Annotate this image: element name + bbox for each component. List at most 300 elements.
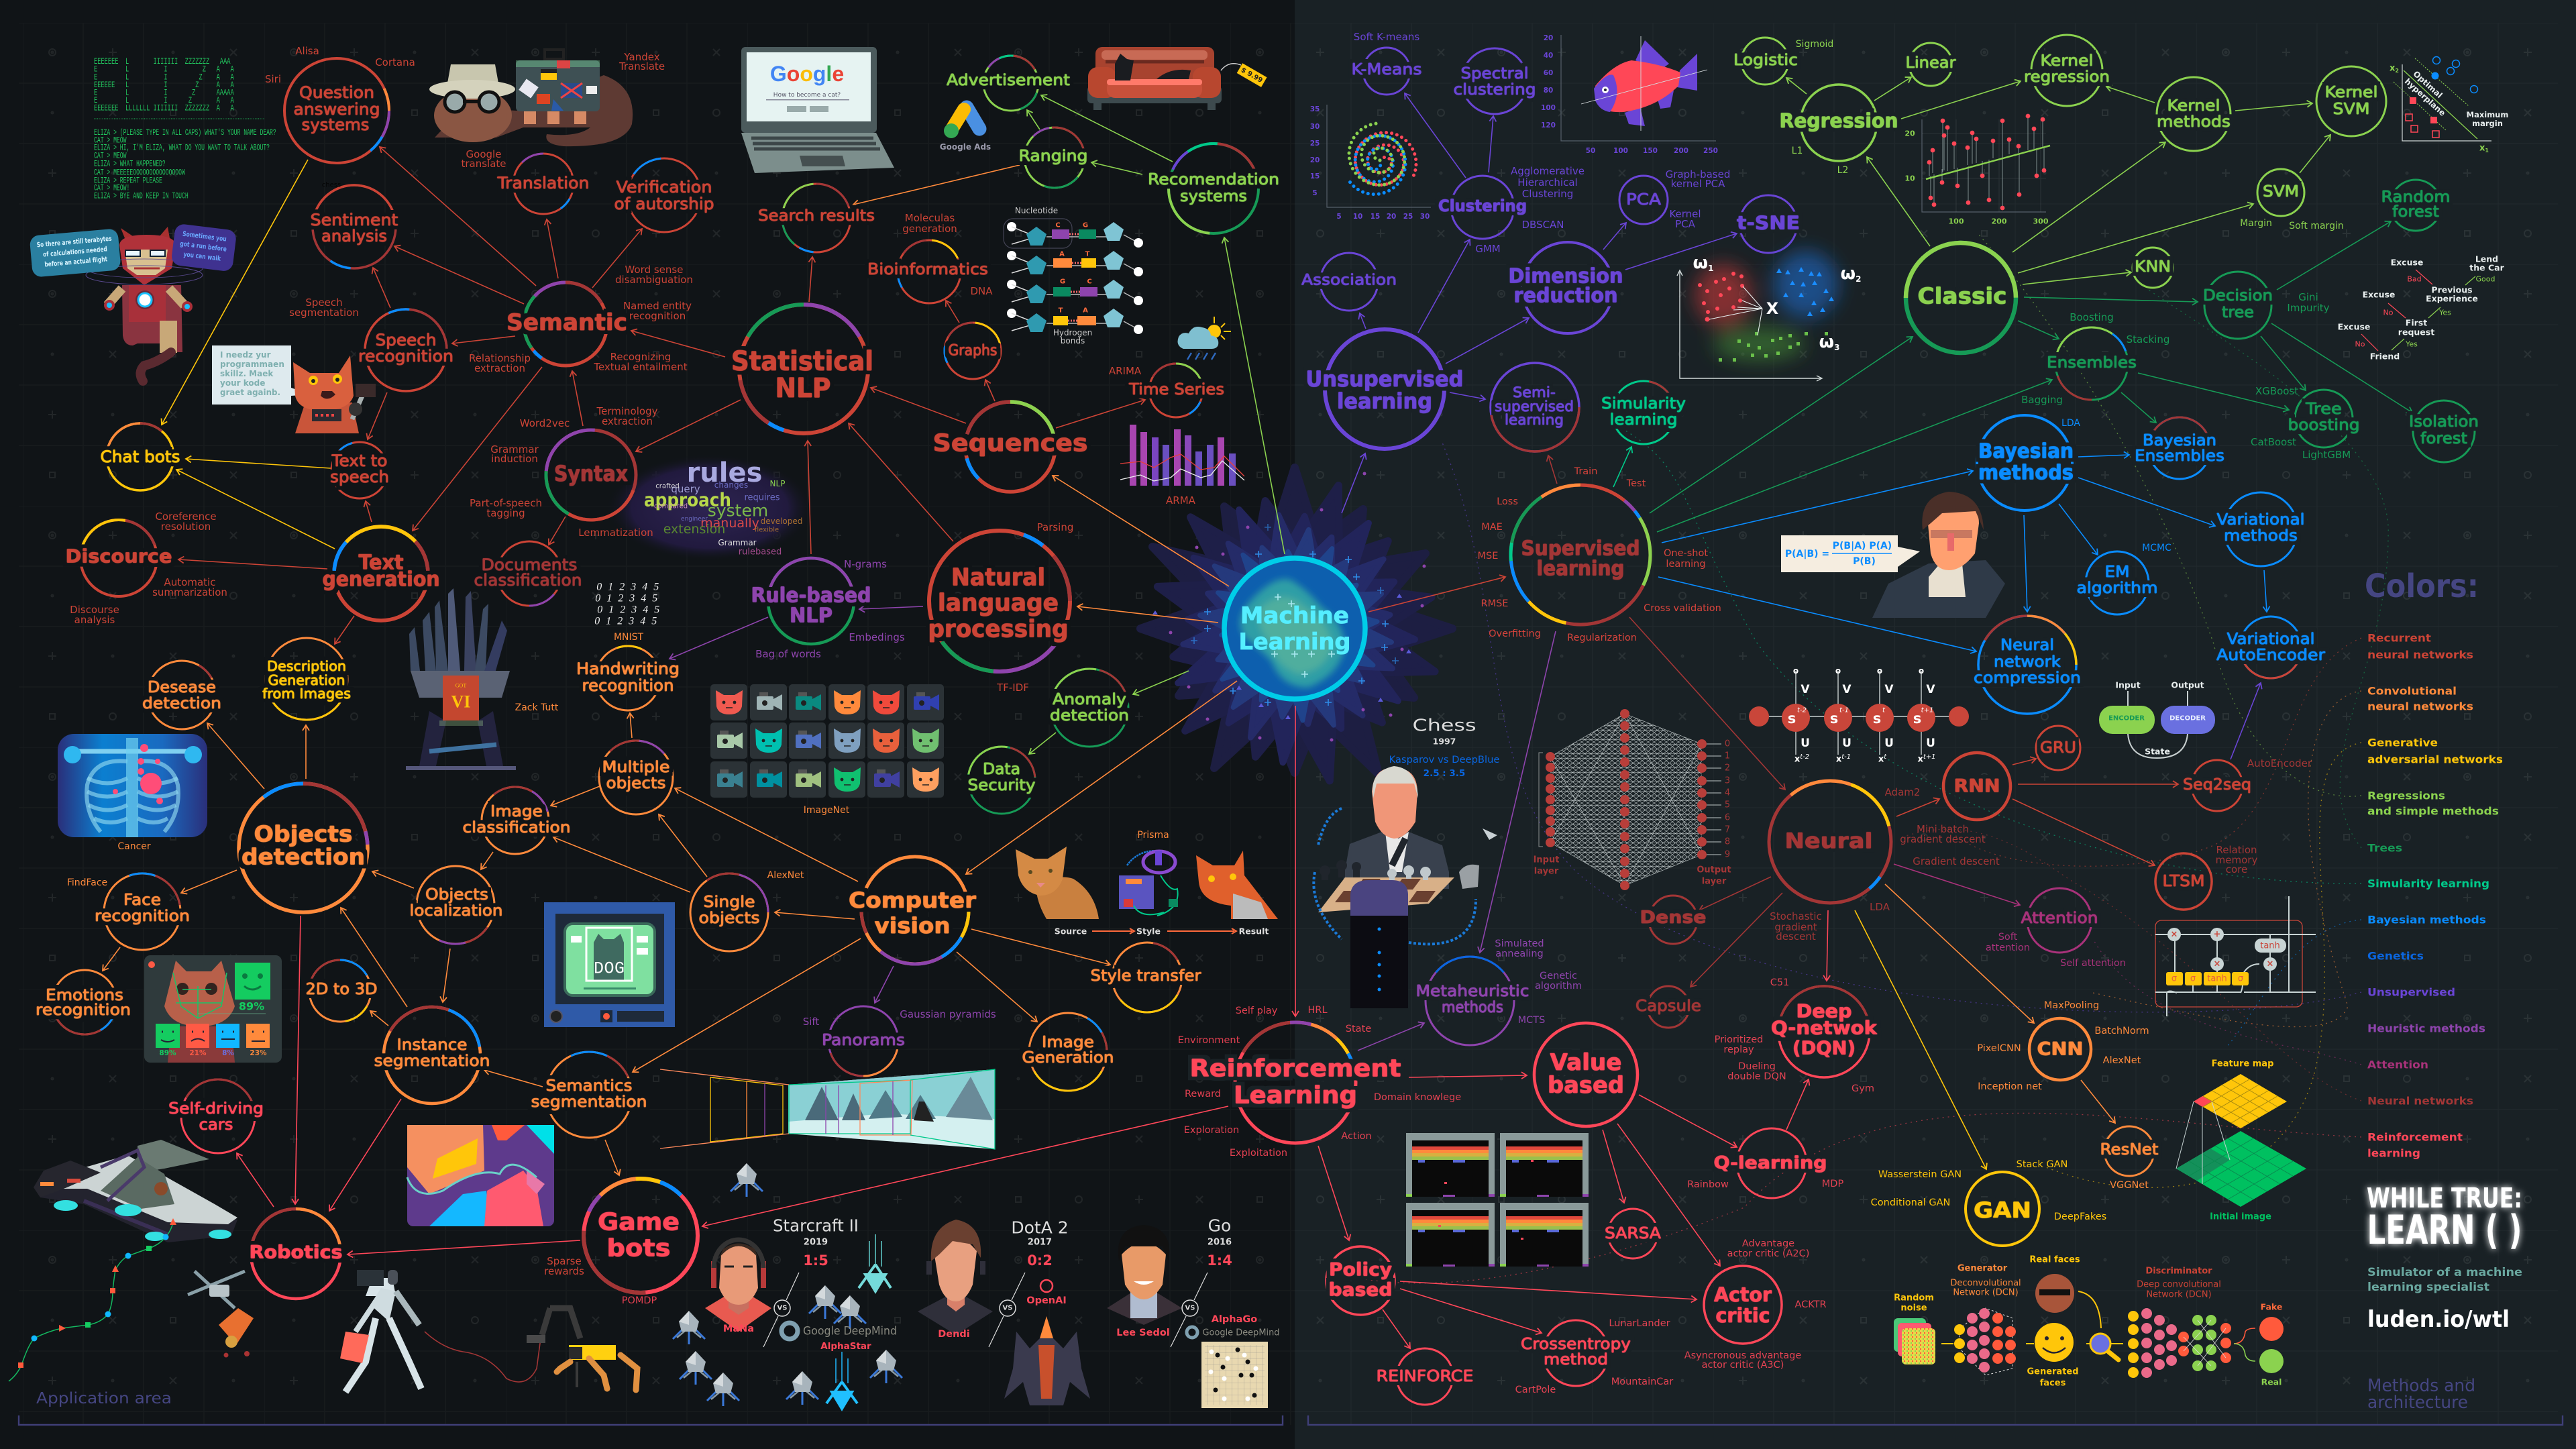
illustration: DNA helix: Hydrogen [1053, 328, 1092, 337]
illustration: face emotion panel [144, 955, 282, 1063]
illustration: iron man cat with speech bubbles: you can walk [183, 251, 221, 263]
node: Policy based: Policy [1329, 1260, 1392, 1280]
section: Dota 2 match: VS [1003, 1304, 1012, 1312]
chart: SVM margin diagram: x [2479, 144, 2485, 153]
node: 2D to 3D [298, 949, 382, 1033]
legend: colour key [2367, 632, 2503, 1159]
node: Data Security [961, 739, 1042, 821]
labels: semantic tasks: ARMA [1166, 494, 1196, 506]
node: Single objects [675, 858, 784, 967]
illustration: retro monitor DOG: DOG [594, 959, 625, 978]
legend: colour key: Convolutional [2367, 684, 2457, 698]
chart: LSTM cell [2155, 896, 2316, 1016]
node: Variational methods: methods [2224, 527, 2298, 545]
labels: tree terms: Boosting [2070, 311, 2114, 323]
node: Image Generation [1015, 999, 1121, 1105]
labels: semantic tasks: Terminology [596, 405, 658, 417]
labels: semantic tasks: Word sense [625, 264, 683, 276]
chart: RNN unrolled diagram: s [1913, 710, 1921, 727]
chart: fish regression: 20 [1544, 34, 1553, 42]
illustration: word cloud rules: engineer [681, 516, 708, 523]
node: Unsupervised learning: learning [1337, 388, 1432, 414]
node: Self-driving cars: Self-driving [168, 1100, 264, 1118]
node: Handwriting recognition [576, 637, 680, 720]
chart: RNN unrolled diagram: x [1836, 754, 1841, 765]
illustration: red cat with programmer speech box: I needz yur [220, 350, 271, 360]
chart: spiral clusters: 15 [1310, 172, 1320, 180]
chart: t-SNE clusters: ω [1693, 253, 1708, 273]
chart: RNN unrolled diagram: t+1 [1921, 707, 1933, 714]
labels: reinforcement learning terms: Exploitation [1230, 1148, 1287, 1159]
node: Documents classification: classification [474, 571, 582, 590]
node: Time Series [1128, 354, 1224, 427]
chart: RNN unrolled diagram: s [1788, 710, 1796, 727]
node: Natural language processing [900, 502, 1099, 700]
chart: decision tree labels: Good [2476, 275, 2495, 283]
chart: RNN unrolled diagram: s [1830, 710, 1838, 727]
section: Go match: VS [1185, 1304, 1195, 1312]
chart: spiral clusters: 5 [1312, 189, 1318, 197]
node: Neural [1744, 756, 1916, 928]
node: Sentiment analysis: analysis [321, 227, 387, 246]
node: Kernel regression [2024, 35, 2110, 106]
chart: decision tree labels: No [2355, 339, 2365, 349]
node: Bayesian methods: methods [1978, 462, 2074, 484]
illustration: DNA helix: C [1087, 278, 1092, 286]
chart: SVM margin diagram: Maximum [2467, 110, 2508, 119]
illustration: word cloud rules: extension [663, 522, 725, 537]
labels: CNN and GAN terms: MaxPooling [2044, 1000, 2099, 1011]
labels: neural terms: descent [1776, 930, 1816, 943]
chart: neural network diagram: 8 [1725, 837, 1730, 847]
node: RNN: RNN [1953, 775, 2000, 797]
labels: supervised learning terms: Test [1626, 478, 1646, 489]
chart: t-SNE clusters: 1 [1708, 264, 1713, 273]
node: Verification of autorship [612, 144, 716, 247]
labels: GAN variants: DeepFakes [2054, 1212, 2106, 1222]
labels: purple NLP terms [755, 558, 996, 1028]
node: Spectral clustering [1453, 48, 1536, 114]
node: Seq2seq [2183, 760, 2251, 811]
illustration: ELIZA terminal: E L I Z A A [94, 97, 234, 106]
chart: regression scatter: 300 [2033, 217, 2049, 225]
node: Verification of autorship: Verification [616, 178, 712, 197]
illustration: retro monitor DOG [544, 902, 675, 1027]
illustration: face emotion panel: 8% [222, 1049, 234, 1057]
chart: LSTM cell: × [2267, 959, 2273, 969]
chart: fish regression: 60 [1544, 69, 1553, 77]
illustration: robot woman with bag [340, 1270, 541, 1392]
labels: reinforcement learning terms: Asyncronous advantage [1684, 1350, 1801, 1361]
chart: RNN unrolled diagram: t-2 [1800, 753, 1809, 761]
chart: fish regression: 120 [1541, 121, 1556, 129]
node: Chat bots [101, 418, 180, 496]
node: Isolation forest: Isolation [2409, 413, 2479, 431]
node: 2D to 3D: 2D to 3D [306, 981, 377, 998]
labels: reinforcement learning terms: CartPole [1515, 1385, 1556, 1395]
chart: GAN pipeline: Generated [2027, 1367, 2079, 1377]
node: Objects localization: localization [409, 902, 503, 920]
chart: spiral clusters: 20 [1387, 213, 1396, 221]
node: Q-learning: Q-learning [1713, 1153, 1827, 1173]
node: Random forest [2381, 180, 2450, 231]
chart: neural network diagram: 1 [1725, 751, 1730, 761]
node: Dense: Dense [1640, 908, 1707, 928]
node: Bayesian Ensembles: Bayesian [2143, 432, 2216, 449]
node: GRU [2036, 726, 2080, 770]
node: Emotions recognition: Emotions [46, 987, 123, 1004]
node: Panorams [822, 1001, 905, 1081]
chart: decision tree labels: Lend [2475, 254, 2498, 264]
chart: LSTM cell: tanh [2207, 974, 2227, 983]
node: Clustering: Clustering [1438, 197, 1527, 215]
illustration: word cloud rules: rulebased [739, 547, 782, 557]
labels: unsupervised terms: Agglomerative [1511, 165, 1585, 177]
illustration: Bayes portrait and formula: P(B) [1853, 556, 1876, 567]
heading: Methods and architecture [2367, 1376, 2475, 1413]
node: Supervised learning: Supervised [1521, 537, 1640, 561]
illustration: Bayes portrait and formula: P(A|B) = [1785, 549, 1829, 559]
node: Self-driving cars: cars [199, 1116, 233, 1134]
labels: semantic tasks: Lemmatization [578, 527, 653, 539]
node: Logistic: Logistic [1733, 52, 1798, 69]
node: Bayesian Ensembles: Ensembles [2135, 447, 2224, 465]
node: Decision tree [2203, 272, 2273, 339]
legend: colour key: adversarial networks [2367, 753, 2503, 766]
labels: CNN and GAN terms: PixelCNN [1977, 1043, 2021, 1054]
labels: tree terms: Bagging [2021, 394, 2063, 406]
labels: semantic tasks: Recognizing [610, 351, 671, 363]
chart: decision tree labels: Excuse [2338, 322, 2370, 331]
chart: spiral clusters [1310, 105, 1431, 221]
node: Image classification: Image [490, 803, 543, 820]
section: Chess match and illustration: Kasparov vs DeepBlue [1389, 755, 1500, 765]
labels: computer vision terms: FindFace [67, 877, 107, 888]
legend: colour key: neural networks [2367, 648, 2473, 661]
labels: neural terms: Stochastic [1770, 910, 1822, 922]
node: SVM: SVM [2263, 183, 2299, 201]
chart: RNN unrolled diagram: t-1 [1839, 707, 1849, 714]
chart: LSTM cell: σ [2171, 974, 2177, 983]
illustration: ELIZA terminal: ELIZA > WHAT HAPPENED? [94, 160, 166, 169]
node: Instance segmentation: segmentation [374, 1053, 490, 1070]
node: Tree boosting [2288, 390, 2360, 447]
labels: semantic tasks: Alisa [295, 45, 319, 57]
node: Bayesian methods [1977, 415, 2074, 511]
section: Go match [1107, 1216, 1280, 1408]
illustration: style transfer cats [1016, 847, 1278, 936]
node: K-Means: K-Means [1351, 61, 1422, 78]
section: Starcraft II match: Starcraft II [773, 1216, 859, 1236]
illustration: iron man cat with speech bubbles: Sometimes you [182, 231, 227, 244]
labels: semantic tasks: Named entity [623, 300, 692, 312]
chart: t-SNE clusters: X [1766, 299, 1779, 318]
illustration: ELIZA terminal: EEEEEEE LLLLLLL IIIIIII ZZZZZZZ A A [94, 104, 234, 113]
node: Semantic [506, 265, 627, 383]
chart: GAN pipeline: Discriminator [2145, 1267, 2212, 1276]
chart: neural network diagram: 5 [1725, 800, 1730, 810]
node: Kernel regression: Kernel [2041, 52, 2093, 70]
heading: Colors: Colors: [2365, 568, 2479, 605]
node: PCA [1619, 176, 1668, 224]
node: Semantics segmentation: Semantics [546, 1077, 632, 1095]
labels: tree terms: LightGBM [2302, 449, 2351, 461]
chart: spiral clusters: 30 [1310, 123, 1320, 131]
heading: Application area: Application area [36, 1390, 172, 1407]
node: Verification of autorship: of autorship [614, 195, 714, 213]
labels: unsupervised terms: GMM [1475, 243, 1501, 255]
chart: SVM margin diagram: hyperplane [2403, 76, 2447, 118]
node: Recomendation systems: systems [1180, 188, 1247, 205]
node: Self-driving cars [168, 1066, 268, 1167]
chart: fish regression [1541, 34, 1718, 155]
labels: tree terms [2021, 291, 2351, 461]
chart: neural network diagram: 7 [1725, 825, 1730, 835]
node: Face recognition: recognition [95, 908, 190, 925]
chart: t-SNE clusters [1677, 251, 1861, 381]
chart: GAN pipeline: noise [1900, 1303, 1927, 1313]
labels: semantic tasks: Word2vec [520, 417, 570, 429]
node: Ranging: Ranging [1018, 148, 1088, 165]
labels: bayesian terms: MCMC [2142, 543, 2171, 553]
node: Neural network compression [1958, 596, 2096, 734]
illustration: chest x-ray [58, 734, 207, 837]
section: Chess match and illustration: Chess [1413, 715, 1476, 735]
node: Data Security: Data [983, 761, 1020, 778]
illustration: ELIZA terminal: CAT > MEOW [94, 152, 127, 161]
chart: neural network diagram: Input [1534, 855, 1559, 865]
legend: colour key: Regressions [2367, 789, 2445, 802]
node: Question answering systems [265, 39, 409, 182]
node: Bayesian Ensembles [2135, 409, 2224, 488]
labels: supervised learning terms: MAE [1481, 522, 1503, 533]
chart: RNN unrolled diagram: t-2 [1797, 707, 1807, 714]
labels: neural terms: gradient [1774, 921, 1817, 933]
arrows: all connections [103, 77, 2412, 1348]
chart: feature map: Initial image [2210, 1212, 2271, 1222]
node: KNN: KNN [2135, 258, 2171, 276]
illustration: DNA helix: G [1083, 221, 1088, 229]
node: Translation: Translation [496, 174, 589, 193]
node: Simularity learning: Simularity [1601, 395, 1686, 413]
chart: regression scatter [1904, 114, 2050, 225]
illustration: style transfer cats: Result [1239, 926, 1269, 936]
node: Speech recognition [352, 296, 460, 405]
node: Attention [2021, 888, 2098, 953]
node: Reinforcement Learning: Reinforcement [1190, 1055, 1401, 1083]
node: Value based: Value [1550, 1049, 1622, 1076]
illustration: word cloud rules: query [671, 483, 700, 495]
node: PCA: PCA [1626, 191, 1661, 209]
illustration: MNIST digits: 0 1 2 3 4 5 [597, 604, 661, 616]
labels: reinforcement learning terms: Action [1341, 1131, 1372, 1142]
labels: tree terms: Stacking [2127, 333, 2169, 345]
section: Go match: 2016 [1208, 1237, 1232, 1248]
node: Simularity learning [1601, 376, 1686, 449]
node: Capsule: Capsule [1635, 998, 1701, 1015]
illustration: red cat with programmer speech box: graet againb. [220, 388, 280, 397]
node: Spectral clustering: clustering [1453, 81, 1536, 99]
chart: LSTM cell: × [2171, 930, 2178, 939]
illustration: encoder decoder: ENCODER [2108, 715, 2145, 722]
illustration: machine learning burst [1118, 443, 1479, 801]
node: Rule-based NLP: Rule-based [751, 584, 871, 608]
node: Translation [496, 141, 589, 227]
chart: decision tree labels: Bad [2407, 275, 2422, 283]
labels: semantic tasks: Translate [619, 60, 665, 72]
labels: semantic tasks: extraction [474, 362, 525, 374]
labels: computer vision terms: MNIST [614, 632, 644, 643]
legend: colour key: Attention [2367, 1059, 2428, 1071]
node: Search results [758, 170, 875, 266]
node: Variational methods: Variational [2216, 511, 2305, 529]
labels: reinforcement learning terms [622, 977, 1874, 1395]
illustration: ELIZA terminal: ELIZA > REPEAT PLEASE [94, 176, 162, 186]
section: Starcraft II match: 1:5 [803, 1252, 828, 1269]
node: Single objects: Single [703, 894, 755, 911]
chart: GAN pipeline: Random [1894, 1293, 1934, 1303]
node: Image classification [463, 773, 570, 867]
node: Supervised learning [1482, 456, 1679, 653]
labels: semantic tasks: Automatic [164, 576, 215, 588]
node: Dimension reduction: reduction [1513, 284, 1618, 307]
chart: decision tree labels: Yes [2405, 339, 2418, 349]
chart: GAN pipeline: Deep convolutional [2137, 1280, 2221, 1289]
node: Metaheuristic methods: Metaheuristic [1415, 983, 1529, 1000]
node: Isolation forest: forest [2420, 430, 2467, 447]
illustration: DNA helix: Nucleotide [1015, 206, 1058, 215]
node: Speech recognition: Speech [376, 331, 436, 350]
labels: semantic tasks: Moleculas [905, 212, 955, 224]
node: Text generation: generation [322, 568, 440, 592]
legend: colour key: Recurrent [2367, 632, 2431, 644]
illustration: encoder decoder: State [2145, 746, 2170, 757]
labels: neural terms: gradient descent [1900, 833, 1986, 845]
node: Logistic [1733, 38, 1798, 85]
labels: unsupervised terms: PCA [1675, 218, 1696, 230]
section: Go match: Lee Sedol [1116, 1328, 1170, 1338]
chart: neural network diagram: 3 [1725, 775, 1730, 786]
illustration: word cloud rules: compared [654, 503, 688, 510]
illustration: DNA helix: A [1059, 251, 1065, 258]
node: Crossentropy method [1521, 1320, 1631, 1386]
node: Neural network compression: compression [1974, 669, 2081, 687]
labels: computer vision terms [67, 632, 1169, 888]
node: Sentiment analysis: chess [322, 181, 341, 189]
labels: GAN variants [1871, 1159, 2106, 1222]
labels: tree terms: Impurity [2287, 302, 2330, 314]
chart: LSTM cell: tanh [2260, 941, 2280, 951]
illustration: word cloud rules: manually [700, 516, 759, 531]
illustration: word cloud rules [606, 454, 814, 561]
node: Dimension reduction [1508, 242, 1623, 333]
chart: RNN unrolled diagram: V [1801, 683, 1810, 696]
labels: GAN variants: Wasserstein GAN [1878, 1169, 1962, 1180]
illustration: ELIZA terminal: E L I Z A A [94, 73, 234, 83]
illustration: word cloud rules: crafted [655, 483, 680, 490]
legend: colour key: learning [2367, 1147, 2420, 1159]
labels: reinforcement learning terms: double DQN [1727, 1071, 1786, 1082]
node: Reinforcement Learning [1190, 998, 1401, 1168]
icon: Google Ads: Google Ads [940, 142, 991, 152]
node: Neural: Neural [1784, 829, 1873, 853]
chart: decision tree labels: Excuse [2391, 258, 2423, 267]
labels: regression terms: L1 [1792, 146, 1803, 156]
node: Discource [66, 514, 172, 602]
node: Neural network compression: network [1994, 653, 2061, 671]
illustration: ELIZA terminal [94, 58, 276, 201]
chart: neural network diagram: 6 [1725, 813, 1730, 822]
chart: RNN unrolled diagram: t [1884, 753, 1887, 761]
node: Objects detection: Objects [254, 821, 353, 847]
labels: reinforcement learning terms: HRL [1307, 1005, 1328, 1016]
section: Go match: 1:4 [1207, 1252, 1232, 1269]
chart: spiral clusters: 20 [1310, 156, 1320, 164]
labels: semantic tasks: summarization [152, 586, 227, 598]
chart: LSTM cell: × [2214, 959, 2220, 969]
node: Dimension reduction: Dimension [1508, 264, 1623, 288]
illustration: DNA helix: A [1083, 307, 1088, 314]
chart: SVM margin diagram: Optimal [2411, 69, 2445, 100]
node: t-SNE [1737, 195, 1800, 253]
chart: RNN unrolled diagram: V [1884, 683, 1894, 696]
chart: neural network diagram: layer [1702, 876, 1727, 887]
icon: stalker bugs [673, 1163, 902, 1409]
chart: neural network diagram: layer [1534, 867, 1559, 876]
chart: RNN unrolled diagram: t [1882, 707, 1886, 714]
illustration: style transfer cats: Source [1055, 926, 1087, 936]
labels: semantic tasks [70, 45, 1196, 1277]
labels: semantic tasks: analysis [74, 614, 115, 626]
node: SARSA [1605, 1209, 1661, 1258]
chart: spiral clusters: 5 [1336, 213, 1342, 221]
chart: t-SNE clusters: ω [1841, 264, 1856, 284]
chart: SVM margin diagram: 2 [2395, 67, 2399, 74]
node: SVM [2257, 169, 2304, 216]
labels: reinforcement learning terms: Exploration [1184, 1125, 1239, 1136]
legend: colour key: neural networks [2367, 700, 2473, 712]
labels: reinforcement learning terms: State [1346, 1024, 1371, 1034]
illustration: DNA helix: C [1055, 221, 1061, 229]
node: LTSM [2155, 853, 2212, 910]
node: Sequences: Sequences [932, 429, 1088, 458]
chart: RNN unrolled diagram: t-1 [1841, 753, 1851, 761]
labels: regression terms [1792, 39, 2344, 231]
chart: spiral clusters: 25 [1403, 213, 1413, 221]
node: Linear [1905, 43, 1956, 86]
node: Classic [1906, 243, 2016, 353]
legend: colour key: Heuristic methods [2367, 1022, 2485, 1034]
chart: RNN unrolled diagram: o [1835, 666, 1841, 676]
illustration: word cloud rules: approach [644, 488, 731, 511]
labels: CNN and GAN terms: Inception net [1978, 1081, 2042, 1092]
illustration: red cat with programmer speech box: programmaen [220, 360, 284, 369]
labels: attention terms: Self attention [2060, 958, 2126, 969]
node: Face recognition [93, 863, 191, 961]
chart: decision tree labels: request [2398, 327, 2434, 337]
chart: SVM margin diagram: 1 [2485, 148, 2489, 153]
background: methods area [1295, 0, 2576, 1449]
text block: tagline [2367, 1266, 2522, 1294]
labels: semantic tasks: extraction [602, 415, 653, 427]
labels: GAN variants: Stack GAN [2017, 1159, 2068, 1170]
legend: colour key: Generative [2367, 737, 2438, 749]
node: Decision tree: tree [2222, 304, 2254, 321]
node: Isolation forest [2409, 400, 2479, 462]
node: Semantic: Semantic [506, 309, 627, 336]
node: Question answering systems: systems [302, 115, 369, 134]
node: Natural language processing: language [938, 589, 1059, 617]
